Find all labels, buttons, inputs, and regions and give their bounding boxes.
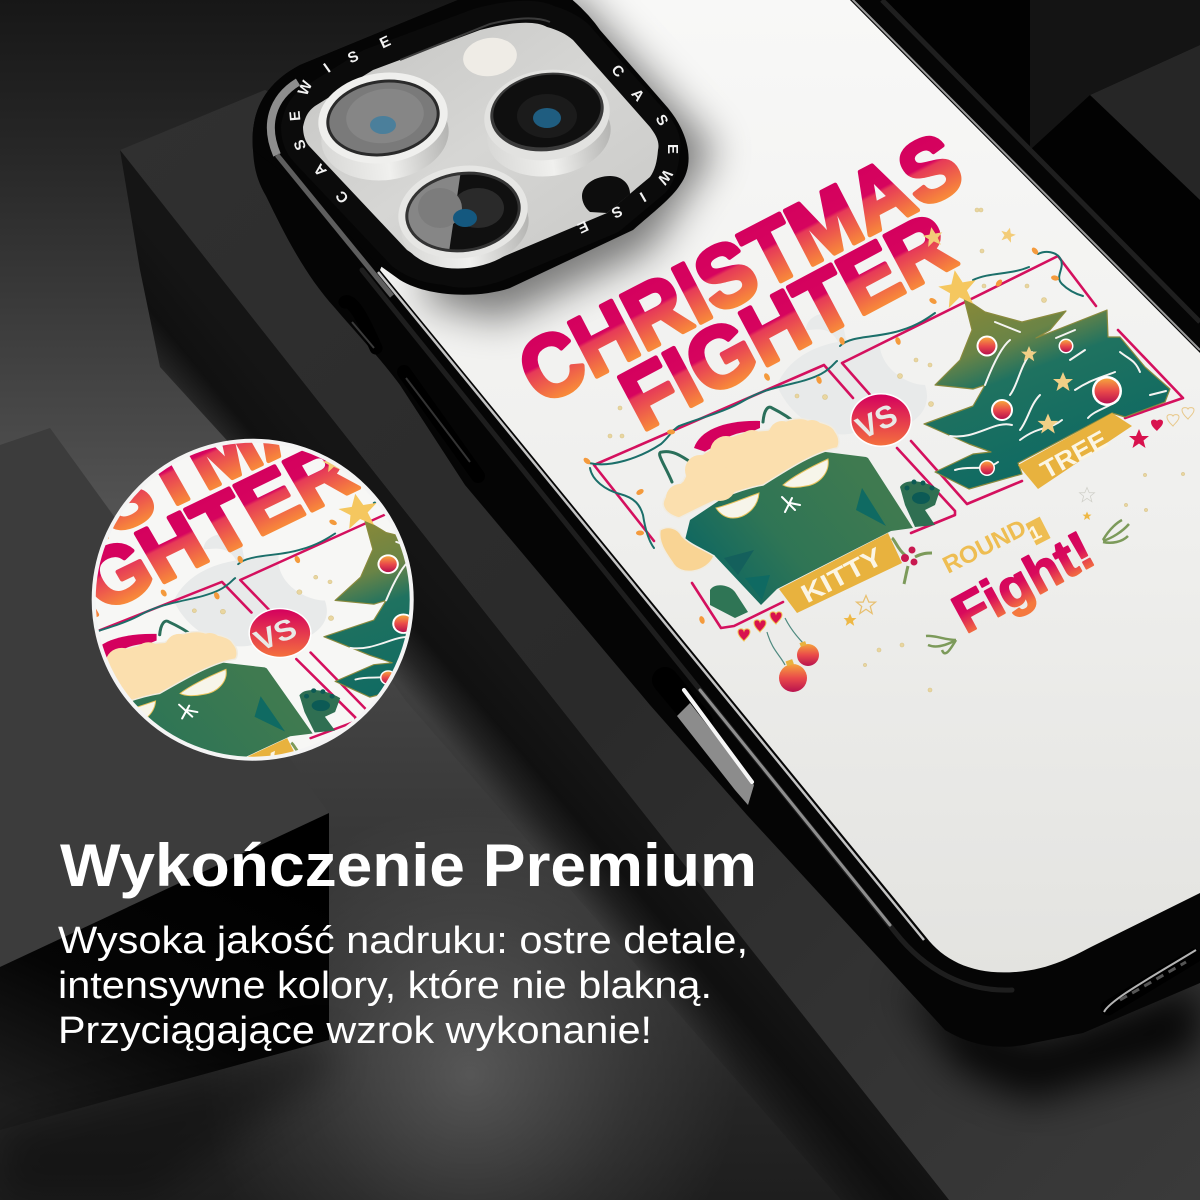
lens: top left <box>312 64 455 188</box>
printed artwork: Christmas Fighter <box>503 113 1194 692</box>
casewise ring lettering: S <box>609 202 625 221</box>
casewise ring lettering: A <box>628 86 648 105</box>
casewise ring lettering: S <box>652 112 671 129</box>
casewise ring lettering: W <box>295 77 317 98</box>
body text <box>58 920 748 1052</box>
casewise ring lettering: E <box>575 217 591 236</box>
phone case body <box>253 0 1200 1047</box>
lens: bottom <box>398 166 528 268</box>
body text: Wysoka jakość nadruku: ostre detale, <box>58 920 748 962</box>
side buttons and charging port <box>345 302 1196 1012</box>
casewise ring lettering: E <box>287 110 304 122</box>
casewise ring lettering: E <box>377 33 393 52</box>
casewise ring lettering: C <box>608 62 628 81</box>
body text: Przyciągające wzrok wykonanie! <box>58 1010 652 1052</box>
casewise ring lettering: A <box>310 160 330 179</box>
magnified detail circle <box>92 438 414 761</box>
casewise ring lettering: E <box>664 144 681 154</box>
lens: top right <box>478 62 616 184</box>
heading: Wykończenie Premium <box>60 832 757 899</box>
casewise ring lettering: W <box>653 166 676 188</box>
body text: intensywne kolory, które nie blakną. <box>58 965 712 1007</box>
white phone back <box>380 0 1200 972</box>
camera flash <box>461 34 519 80</box>
casewise ring lettering <box>287 33 681 236</box>
casewise ring lettering: S <box>345 48 361 67</box>
casewise ring lettering: S <box>291 137 310 152</box>
camera island <box>253 0 689 296</box>
casewise ring lettering: I <box>321 60 334 77</box>
casewise ring lettering: I <box>637 188 649 205</box>
casewise ring lettering: C <box>332 187 352 206</box>
microphone hole <box>582 176 630 213</box>
